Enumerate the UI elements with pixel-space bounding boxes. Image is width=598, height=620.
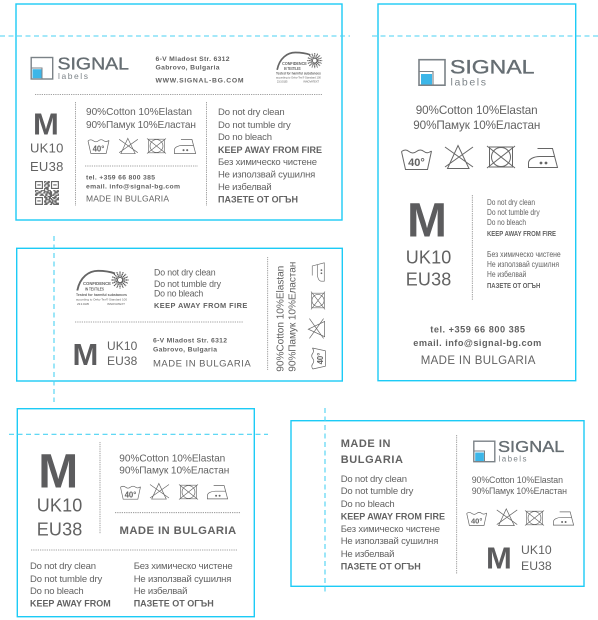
- care instructions, English: [30, 561, 111, 610]
- panel: label 2, portrait: [378, 4, 576, 381]
- contact details: [413, 325, 541, 367]
- care icons: [402, 146, 558, 170]
- care instructions, Bulgarian: [134, 561, 233, 610]
- composition text: 90%Cotton 10%Elastan: [86, 107, 192, 118]
- QR code: [35, 182, 59, 204]
- care icons: 40°: [125, 490, 136, 500]
- care instructions: Do not tumble dry: [154, 279, 222, 289]
- rotated composition text: 90%Памук 10%Еластан: [287, 262, 298, 372]
- size block: UK10: [37, 496, 82, 516]
- size block: UK10: [521, 543, 552, 557]
- certification mark: Confidence in Textiles: Tested for harmful substances: [76, 292, 128, 297]
- composition text: 90%Памук 10%Еластан: [413, 119, 540, 132]
- size block: EU38: [30, 159, 63, 174]
- address block: 6-V Mladost Str. 6312: [156, 56, 230, 63]
- certification mark: Confidence in Textiles: [276, 53, 322, 84]
- logo: Signal labels: [31, 54, 129, 81]
- address and origin: [153, 338, 251, 370]
- address and origin: Gabrovo, Bulgaria: [153, 347, 217, 354]
- size block: [406, 195, 451, 289]
- rotated care icons: 40°: [316, 353, 325, 364]
- care icons: 40°: [93, 144, 104, 154]
- care instructions: Do not dry clean: [154, 268, 216, 278]
- care instructions: KEEP AWAY FROM FIRE: [218, 145, 322, 156]
- size block: [486, 541, 552, 576]
- care instructions: Do not dry clean: [341, 474, 407, 485]
- size block: M: [486, 541, 512, 576]
- size block: M: [72, 337, 98, 372]
- size block: M: [38, 445, 78, 498]
- care instructions: Не избелвай: [487, 270, 526, 279]
- size block: EU38: [521, 559, 552, 573]
- logo: Signal labels: SIGNAL: [498, 439, 564, 456]
- certification mark: Confidence in Textiles: CONFIDENCE: [282, 61, 307, 66]
- size block: EU38: [37, 520, 82, 540]
- care instructions: KEEP AWAY FROM FIRE: [487, 231, 556, 238]
- composition text: [472, 475, 567, 496]
- composition text: 90%Памук 10%Еластан: [86, 120, 196, 131]
- size block: [72, 337, 138, 372]
- address and origin: 6-V Mladost Str. 6312: [153, 338, 227, 345]
- care icons: [467, 509, 574, 526]
- care instructions: [341, 474, 445, 573]
- composition text: 90%Cotton 10%Elastan: [416, 104, 538, 117]
- logo: Signal labels: SIGNAL: [58, 54, 129, 74]
- certification mark: Confidence in Textiles: according to Oeko-Tex® Standard 100: [276, 76, 321, 80]
- panel: label 3, horizontal with rotated side text: [17, 248, 342, 381]
- size block: UK10: [107, 339, 138, 353]
- certification mark: Confidence in Textiles: INNOVATEXT: [303, 80, 320, 84]
- care instructions: Do not dry clean: [218, 107, 285, 118]
- care instructions: Без химическо чистене: [487, 250, 561, 259]
- care instructions: Do not tumble dry: [487, 208, 540, 217]
- certification mark: Confidence in Textiles: according to Oeko-Tex® Standard 100: [76, 298, 127, 302]
- care instructions: Do no bleach: [487, 218, 526, 227]
- size block: M: [407, 195, 447, 248]
- origin heading: BULGARIA: [341, 454, 403, 466]
- contact details: tel. +359 66 800 385: [430, 325, 525, 335]
- logo: Signal labels: [474, 439, 564, 464]
- care instructions: Не избелвай: [341, 549, 394, 560]
- size block: M: [33, 106, 59, 141]
- contact details: MADE IN BULGARIA: [86, 194, 169, 204]
- composition text: 90%Cotton 10%Elastan: [119, 453, 225, 464]
- size block: EU38: [107, 354, 138, 368]
- care instructions: ПАЗЕТЕ ОТ ОГЪН: [218, 194, 298, 205]
- certification mark: Confidence in Textiles: CONFIDENCE: [83, 281, 112, 287]
- panel: label 5, landscape with side fold: [291, 421, 584, 586]
- size block: EU38: [406, 269, 451, 289]
- care instructions, English: Do not tumble dry: [30, 574, 103, 585]
- certification mark: Confidence in Textiles: Tested for harmful substances: [276, 72, 321, 76]
- rotated care icons: [308, 263, 325, 369]
- size block: [30, 106, 63, 174]
- address block: Gabrovo, Bulgaria: [156, 65, 220, 72]
- logo: Signal labels: labels: [498, 455, 526, 464]
- care instructions: Без химическо чистене: [341, 524, 440, 535]
- care instructions: Не избелвай: [218, 182, 272, 193]
- care instructions: Do not tumble dry: [218, 120, 291, 131]
- care instructions: [218, 107, 322, 205]
- origin line: MADE IN BULGARIA: [120, 525, 236, 537]
- care instructions: Без химическо чистене: [218, 157, 317, 168]
- rotated composition text: [276, 262, 298, 372]
- care instructions, English: Do not dry clean: [30, 561, 96, 572]
- care instructions, Bulgarian: Не избелвай: [134, 586, 187, 597]
- care icons: [120, 483, 228, 500]
- contact details: MADE IN BULGARIA: [421, 355, 536, 367]
- contact details: tel. +359 66 800 385: [86, 174, 155, 182]
- size block: [37, 445, 82, 540]
- care instructions, English: KEEP AWAY FROM: [30, 599, 111, 610]
- care instructions: Do not tumble dry: [341, 486, 414, 497]
- care instructions: KEEP AWAY FROM FIRE: [341, 512, 445, 523]
- composition text: [86, 107, 196, 131]
- care icons: [88, 138, 196, 154]
- logo: Signal labels: labels: [58, 71, 88, 81]
- care instructions: ПАЗЕТЕ ОТ ОГЪН: [487, 283, 540, 290]
- care instructions, Bulgarian: Не използвай сушилня: [134, 574, 231, 585]
- composition text: [413, 104, 540, 132]
- address and origin: MADE IN BULGARIA: [153, 359, 251, 370]
- address block: WWW.SIGNAL-BG.COM: [156, 78, 244, 85]
- size block: UK10: [406, 247, 451, 267]
- logo: Signal labels: labels: [450, 77, 486, 89]
- contact details: email. info@signal-bg.com: [413, 338, 541, 348]
- address block: [156, 56, 244, 85]
- care instructions: Не използвай сушилня: [487, 260, 559, 269]
- origin heading: MADE IN: [341, 438, 390, 450]
- care instructions: Не използвай сушилня: [218, 170, 315, 181]
- logo: Signal labels: [419, 57, 534, 89]
- certification mark: Confidence in Textiles: IN TEXTILES: [284, 66, 301, 71]
- certification mark: Confidence in Textiles: [76, 271, 128, 306]
- logo: Signal labels: SIGNAL: [450, 57, 534, 79]
- origin heading: [341, 438, 403, 466]
- certification mark: Confidence in Textiles: IN TEXTILES: [85, 287, 105, 293]
- contact details: [86, 174, 180, 204]
- certification mark: Confidence in Textiles: 23.3.0135: [277, 80, 288, 84]
- composition text: 90%Cotton 10%Elastan: [472, 475, 563, 485]
- rotated composition text: 90%Cotton 10%Elastan: [276, 266, 287, 372]
- certification mark: Confidence in Textiles: INNOVATEXT: [107, 302, 125, 306]
- composition text: 90%Памук 10%Еластан: [472, 486, 567, 496]
- contact details: email. info@signal-bg.com: [86, 184, 180, 191]
- care instructions, Bulgarian: ПАЗЕТЕ ОТ ОГЪН: [134, 599, 214, 610]
- care instructions: Не използвай сушилня: [341, 536, 438, 547]
- care icons: 40°: [408, 157, 425, 169]
- certification mark: Confidence in Textiles: 23.3.0135: [77, 302, 89, 306]
- care instructions, English: Do no bleach: [30, 586, 84, 597]
- care instructions: Do no bleach: [341, 499, 395, 510]
- size block: UK10: [30, 141, 63, 156]
- composition text: [119, 453, 229, 477]
- care instructions, Bulgarian: Без химическо чистене: [134, 561, 233, 572]
- care instructions: Do not dry clean: [487, 198, 535, 207]
- composition text: 90%Памук 10%Еластан: [119, 466, 229, 477]
- care instructions: Do no bleach: [218, 132, 272, 143]
- care instructions: [487, 198, 561, 290]
- care instructions: [154, 268, 247, 310]
- care instructions: Do no bleach: [154, 289, 203, 299]
- care instructions: ПАЗЕТЕ ОТ ОГЪН: [341, 562, 421, 573]
- panel: label 4, square: [17, 409, 254, 617]
- care icons: 40°: [471, 517, 482, 526]
- panel: label 1, landscape with logo and address: [16, 4, 342, 220]
- care instructions: KEEP AWAY FROM FIRE: [154, 301, 247, 310]
